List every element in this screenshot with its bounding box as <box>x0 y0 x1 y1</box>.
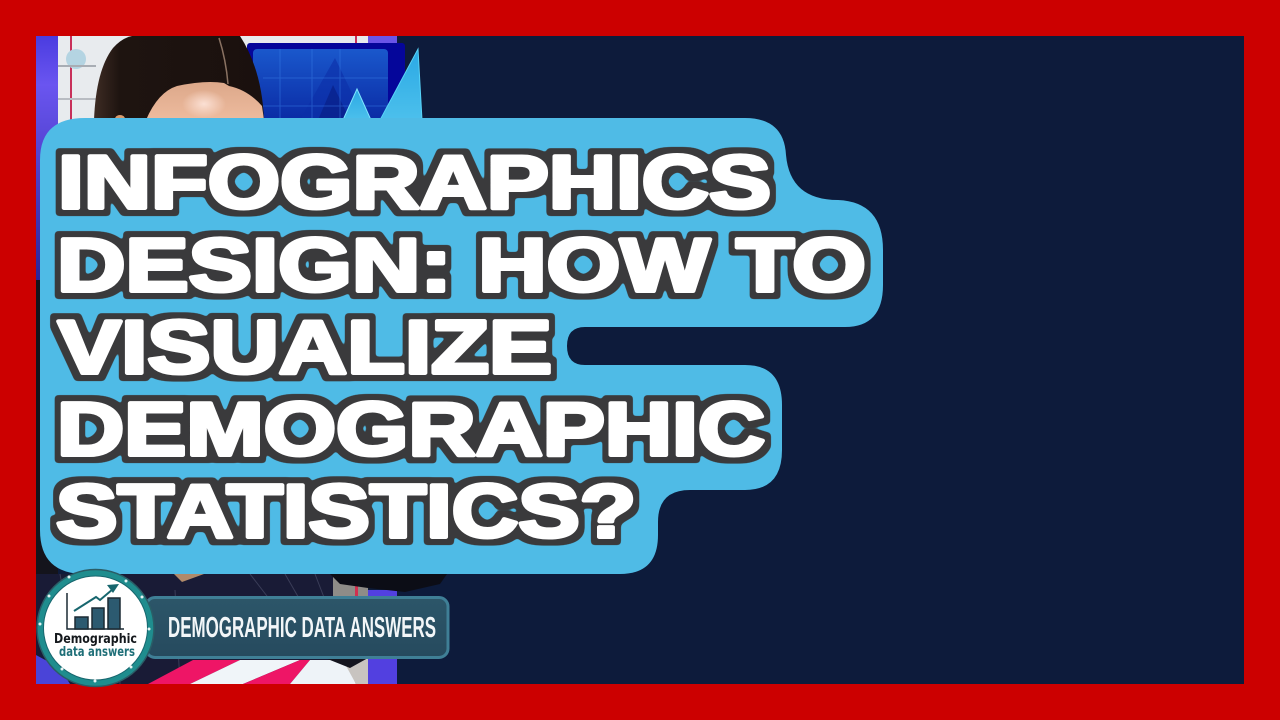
title line 4: DEMOGRAPHIC <box>57 387 765 471</box>
title line 5: STATISTICS? <box>56 469 636 553</box>
logo text: Demographic <box>54 631 137 647</box>
title line 2: DESIGN: HOW TO <box>57 223 866 307</box>
bar chart icon <box>67 584 124 629</box>
title background blob <box>40 118 883 574</box>
title <box>56 140 866 553</box>
channel name badge <box>146 598 448 658</box>
title line 1: INFOGRAPHICS <box>58 140 771 224</box>
background photo: presenter and chart screen <box>36 36 447 684</box>
logo badge <box>37 570 154 686</box>
logo badge: data answers <box>59 644 135 660</box>
title line 3: VISUALIZE <box>58 305 552 389</box>
channel name: DEMOGRAPHIC DATA ANSWERS <box>168 612 436 644</box>
